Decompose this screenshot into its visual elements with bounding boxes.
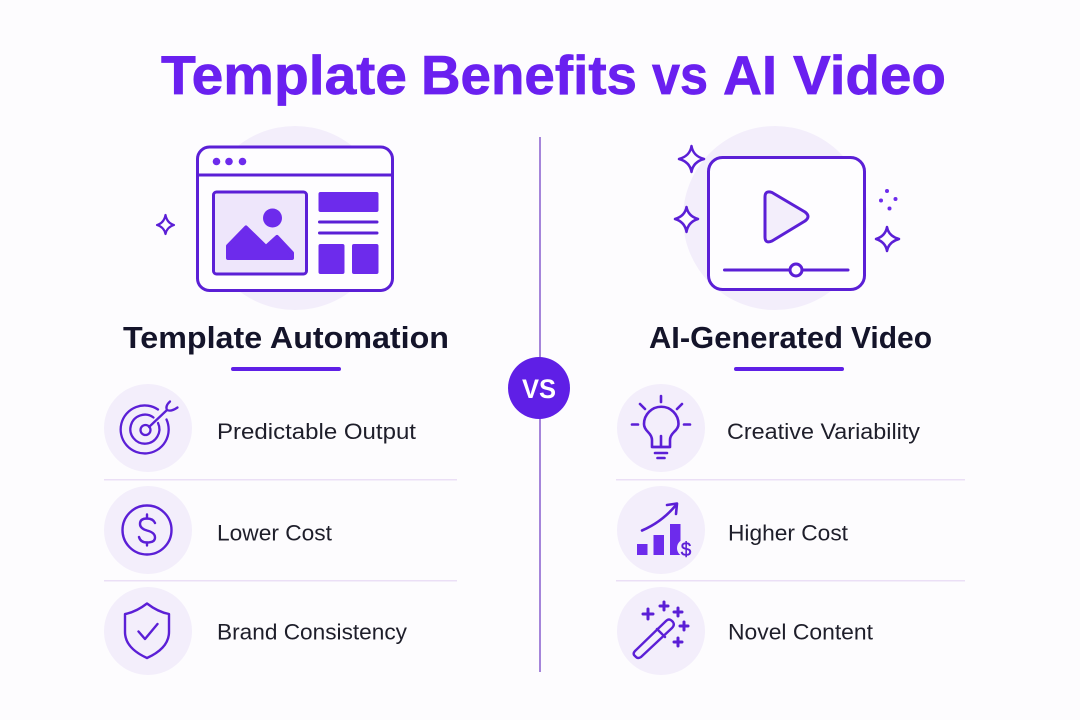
row divider [616,479,965,480]
heading: ai-generated video [649,320,932,355]
row: creative variability [617,384,920,472]
title: Benefits [421,44,637,106]
row: brand consistency: Brand Consistency [217,620,407,644]
icon: target [121,402,178,453]
row: novel content: Novel Content [728,620,873,644]
icon: rising bars with dollar [637,504,695,561]
vs badge: VS [522,374,556,404]
title: AI [723,44,777,106]
title: Template [161,44,407,106]
icon: dollar coin [122,506,172,554]
row: brand consistency [104,587,407,675]
title: vs [652,44,708,106]
icon: magic wand [634,602,688,658]
center divider line [539,137,541,672]
row: lower cost [104,486,332,574]
title: Video [793,44,946,106]
row: creative variability: Creative Variability [727,419,920,444]
heading underline [734,367,844,371]
row: predictable output: Predictable Output [217,419,416,444]
panel: ai-generated video [616,126,965,675]
row: predictable output [104,384,416,472]
panel: template automation [104,126,457,675]
row divider [104,580,457,582]
icon: shield check [125,604,169,658]
row divider [104,479,457,480]
icon: lightbulb [632,396,690,458]
icon: rising bars with dollar: $ [681,540,692,561]
vs badge [508,357,570,419]
row divider [616,580,965,582]
heading underline [231,367,341,371]
title [161,44,946,106]
icon: browser template window [157,126,392,310]
row: higher cost [617,486,848,574]
heading: ai-generated video: Video [851,320,932,355]
row: higher cost: Higher Cost [728,520,848,546]
heading: ai-generated video: AI-Generated [649,320,843,355]
icon: video player [675,126,899,310]
heading: template automation: Template Automation [123,320,449,355]
row: lower cost: Lower Cost [217,520,332,546]
row: novel content [617,587,873,675]
